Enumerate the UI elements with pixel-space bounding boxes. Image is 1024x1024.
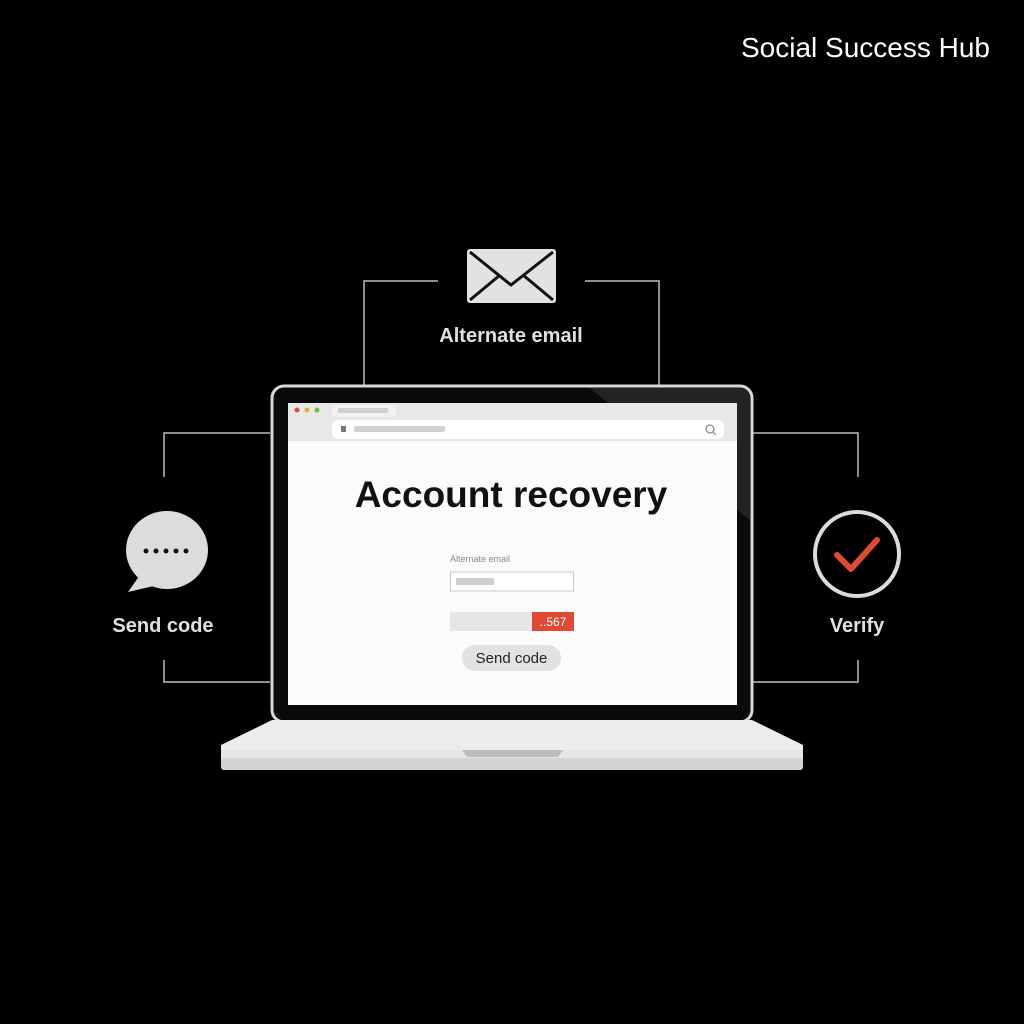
button: send code: Send code: [476, 650, 547, 667]
label: verify: Verify: [830, 615, 885, 637]
label: send code: Send code: [112, 615, 214, 637]
laptop: [221, 386, 803, 770]
heading: account recovery: Account recovery: [355, 474, 668, 515]
icon: speech bubble: [126, 511, 208, 592]
laptop lid: [272, 386, 752, 722]
browser bar: [288, 403, 737, 441]
form: [450, 554, 574, 631]
form: ..567: [540, 615, 567, 629]
connector lines: [164, 281, 858, 682]
form: Alternate email: [450, 554, 510, 564]
icon: verify check: [815, 512, 899, 596]
title: brand: Social Success Hub: [741, 32, 990, 63]
screen: [288, 403, 737, 705]
icon: envelope: [467, 249, 556, 303]
laptop base: [221, 720, 803, 770]
button: send code: [462, 645, 561, 671]
label: alternate email: Alternate email: [439, 325, 583, 347]
